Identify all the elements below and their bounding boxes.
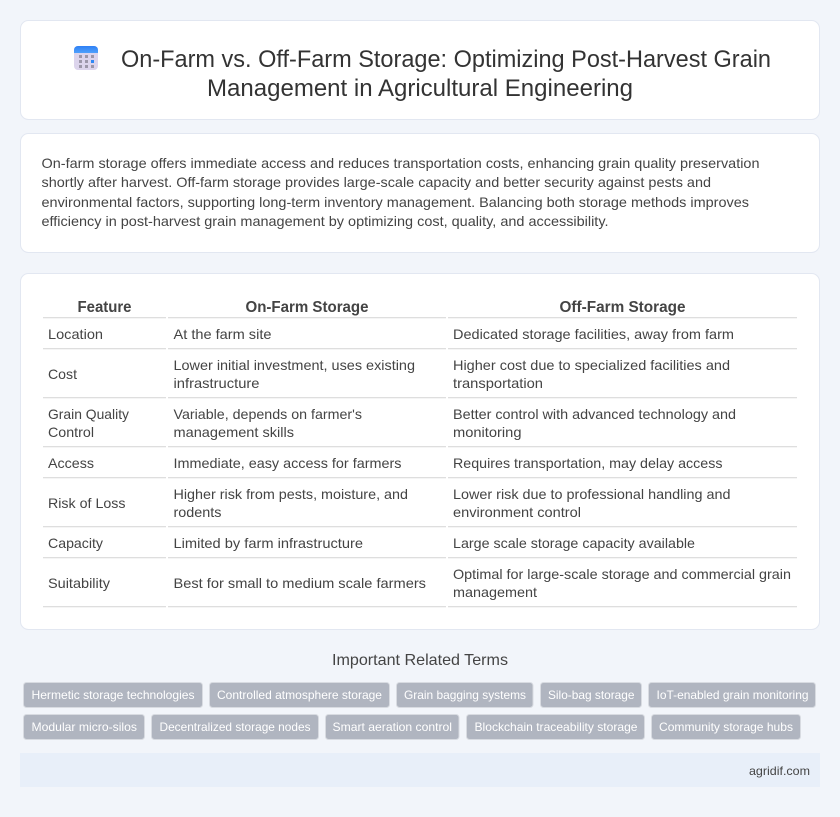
title: On-Farm vs. Off-Farm Storage: Optimizing Post-Harvest Grain (121, 46, 771, 73)
table header row: On-Farm Storage (246, 299, 369, 316)
pill: grain bagging: Grain bagging systems (404, 688, 526, 702)
row: risk of loss: Risk of Loss (48, 495, 126, 511)
row: cost: transportation (453, 375, 543, 391)
pill: hermetic storage: Hermetic storage technologies (32, 688, 194, 702)
title (121, 46, 771, 102)
row: access (48, 455, 722, 471)
row: access: Access (48, 455, 94, 471)
row: suitability: Suitability (48, 575, 110, 591)
pill: controlled atmosphere (210, 682, 390, 708)
row: suitability: Best for small to medium scale farmers (174, 575, 426, 591)
pill: community hubs (652, 714, 800, 740)
pill: silo-bag: Silo-bag storage (548, 688, 635, 702)
icon: calendar storage grid (74, 46, 98, 70)
row: risk of loss: environment control (453, 504, 581, 520)
footer source: agridif.com (749, 764, 810, 778)
row: capacity: Large scale storage capacity available (453, 535, 695, 551)
pill: blockchain traceability (466, 714, 644, 740)
row: capacity: Limited by farm infrastructure (174, 535, 363, 551)
pill: blockchain traceability: Blockchain traceability storage (474, 720, 638, 734)
footer bar (20, 753, 820, 787)
row: cost: infrastructure (174, 375, 260, 391)
pill: decentralized nodes: Decentralized storage nodes (160, 720, 310, 734)
row: access: Immediate, easy access for farmers (174, 455, 402, 471)
row: cost: Lower initial investment, uses existing (174, 357, 415, 373)
pill: smart aeration: Smart aeration control (332, 720, 452, 734)
intro paragraph: shortly after harvest. Off-farm storage provides large-scale capacity and better security against pests and (42, 174, 711, 190)
pill: decentralized nodes (152, 714, 318, 740)
table header row: Feature (78, 299, 132, 316)
row: location (48, 326, 734, 342)
pill: hermetic storage (24, 682, 202, 708)
row: risk of loss (48, 486, 730, 520)
row: capacity (48, 535, 695, 551)
panel: header (20, 20, 820, 120)
row: capacity: Capacity (48, 535, 103, 551)
row: access: Requires transportation, may delay access (453, 455, 722, 471)
intro paragraph: environmental factors, supporting long-term inventory management. Balancing both storage methods improves (42, 194, 749, 210)
title: Management in Agricultural Engineering (207, 75, 633, 102)
pill: micro-silos: Modular micro-silos (32, 720, 137, 734)
row: suitability: management (453, 584, 537, 600)
row: risk of loss: Higher risk from pests, moisture, and (174, 486, 408, 502)
row: grain quality control: monitoring (453, 424, 522, 440)
row: risk of loss: rodents (174, 504, 222, 520)
pill: iot monitoring (648, 682, 816, 708)
row: grain quality control: Variable, depends on farmer's (174, 406, 362, 422)
pill: community hubs: Community storage hubs (659, 720, 793, 734)
row: grain quality control: Control (48, 424, 94, 440)
row: suitability: Optimal for large-scale storage and commercial grain (453, 566, 791, 582)
row: location: Dedicated storage facilities, away from farm (453, 326, 734, 342)
heading: important related terms: Important Related Terms (332, 652, 508, 669)
pill: silo-bag (540, 682, 642, 708)
row: location: At the farm site (174, 326, 272, 342)
pill: iot monitoring: IoT-enabled grain monitoring (656, 688, 808, 702)
related term pills (24, 682, 816, 740)
row: suitability (48, 566, 791, 600)
row: grain quality control: Better control with advanced technology and (453, 406, 736, 422)
panel: introduction text (20, 134, 820, 252)
table header row: Off-Farm Storage (560, 299, 686, 316)
intro paragraph: On-farm storage offers immediate access and reduces transportation costs, enhancing grain quality preservation (42, 155, 760, 171)
row: grain quality control: management skills (174, 424, 294, 440)
row: cost: Cost (48, 366, 77, 382)
row: grain quality control (48, 406, 736, 440)
row: cost (48, 357, 730, 391)
row: location: Location (48, 326, 103, 342)
panel: comparison table (20, 274, 820, 630)
pill: controlled atmosphere: Controlled atmosphere storage (217, 688, 382, 702)
row: risk of loss: Lower risk due to professional handling and (453, 486, 730, 502)
intro paragraph (42, 155, 760, 229)
pill: smart aeration (326, 714, 459, 740)
row: cost: Higher cost due to specialized facilities and (453, 357, 730, 373)
pill: micro-silos (24, 714, 144, 740)
row: grain quality control: Grain Quality (48, 406, 129, 422)
intro paragraph: efficiency in post-harvest grain management by optimizing cost, quality, and accessibility. (42, 213, 608, 229)
pill: grain bagging (396, 682, 533, 708)
table header row (78, 299, 686, 316)
